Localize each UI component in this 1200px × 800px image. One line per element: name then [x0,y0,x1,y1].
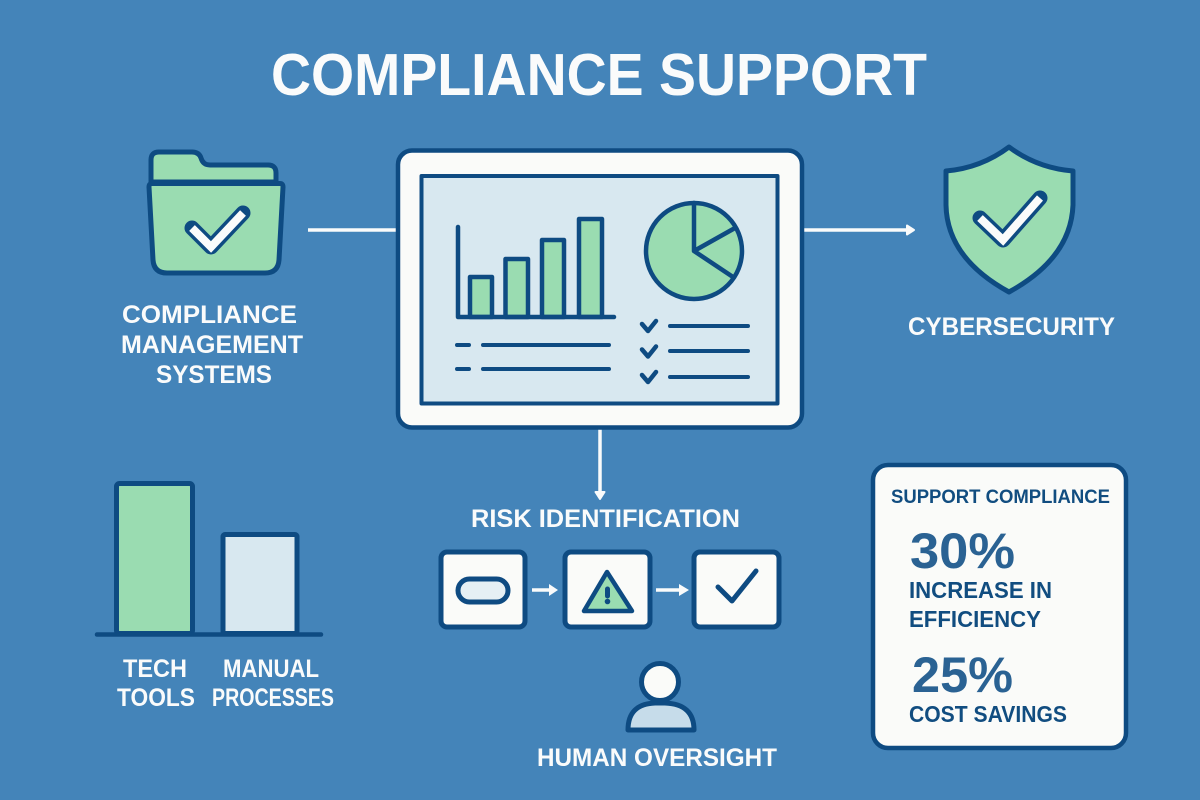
icon: person [628,664,694,730]
stat label: cost savings: COST SAVINGS [909,701,1067,727]
pie chart [646,203,742,299]
panel: dashboard monitor [398,150,802,428]
stats heading: SUPPORT COMPLIANCE [891,487,1110,508]
stat label: increase in efficiency: INCREASE IN [909,577,1052,603]
label: compliance management systems [121,301,303,389]
text lines under bar chart [457,345,609,369]
label: compliance management systems: COMPLIANCE [122,301,297,329]
panel: support compliance stats [873,465,1126,748]
icon: cybersecurity shield [946,147,1073,292]
bar chart [458,219,614,317]
label: compliance management systems: SYSTEMS [156,361,272,389]
stat label: increase in efficiency: EFFICIENCY [909,606,1041,632]
label: compliance management systems: MANAGEMENT [121,331,303,359]
chart: tech tools vs manual processes [97,484,321,634]
stat label: increase in efficiency [909,577,1052,632]
label: manual processes: PROCESSES [212,684,334,712]
label: manual processes: MANUAL [223,655,319,683]
arrow: dashboard to cybersecurity [804,226,914,234]
label: manual processes [212,655,334,712]
stat: 25%: 25% [912,647,1013,703]
stat: 30%: 30% [910,523,1015,579]
icon: compliance folder [149,152,283,273]
label: tech tools: TOOLS [117,684,195,712]
label: tech tools [117,655,195,712]
label: tech tools: TECH [123,655,187,683]
title: COMPLIANCE SUPPORT [271,42,927,108]
label: cybersecurity: CYBERSECURITY [908,313,1115,341]
label: human oversight: HUMAN OVERSIGHT [537,744,777,772]
risk step 3: check [694,552,779,627]
dashboard screen [422,176,778,404]
arrow: step 2 to step 3 [656,584,689,596]
arrow: step 1 to step 2 [532,584,558,596]
connector: folder to dashboard [308,228,396,232]
risk step 1: input [441,552,525,627]
arrow: dashboard to risk identification [596,429,604,499]
heading: risk identification: RISK IDENTIFICATION [471,505,740,533]
risk step 2: warning [565,552,650,627]
checklist [642,321,748,382]
